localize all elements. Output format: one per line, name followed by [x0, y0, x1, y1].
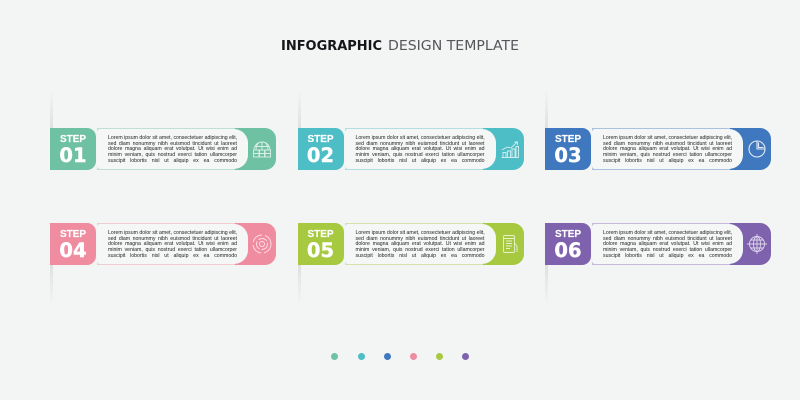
badge: step 02 [298, 128, 344, 170]
text: step 01 description: dolore magna aliquam erat volutpat. Ut wisi enim ad [108, 146, 237, 152]
badge: step 04 [50, 223, 96, 265]
badge: step 03: 03 [554, 144, 582, 166]
badge: step 04: 04 [59, 238, 87, 262]
panel: step 01 [50, 106, 276, 170]
badge: step 02: 02 [307, 144, 334, 166]
badge: step 05: STEP [307, 229, 334, 240]
badge: step 03: STEP [555, 134, 581, 145]
panel: step 03 [545, 106, 771, 170]
text: step 04 description: minim veniam, quis nostrud exerci tation ullamcorper [108, 247, 237, 253]
badge: step 05 [298, 223, 344, 265]
text: step 03 description: Lorem ipsum dolor sit amet, consectetuer adipiscing elit, [603, 135, 732, 141]
text: step 06 description: dolore magna aliquam erat volutpat. Ut wisi enim ad [603, 241, 732, 247]
text: step 05 description: suscipit lobortis nisl ut aliquip ex ea commodo [356, 253, 484, 259]
text: step 01 description: sed diam nonummy nibh euismod tincidunt ut laoreet [108, 141, 237, 147]
badge: step 06: STEP [555, 229, 581, 240]
panel: step 02 [298, 106, 524, 170]
text: step 03 description: sed diam nonummy nibh euismod tincidunt ut laoreet [603, 141, 732, 147]
text: step 06 description: Lorem ipsum dolor sit amet, consectetuer adipiscing elit, [603, 230, 732, 236]
title [281, 39, 519, 54]
badge: step 01: STEP [60, 134, 86, 145]
text: step 03 description: dolore magna aliquam erat volutpat. Ut wisi enim ad [603, 146, 732, 152]
text: step 01 description: Lorem ipsum dolor sit amet, consectetuer adipiscing elit, [108, 135, 237, 141]
text: step 03 description [603, 135, 732, 164]
icon: concentric target [252, 234, 272, 254]
icon: hand holding phone [503, 235, 518, 253]
text: step 04 description: Lorem ipsum dolor sit amet, consectetuer adipiscing elit, [108, 230, 237, 236]
icon: pie chart [748, 140, 766, 158]
text: step 06 description: sed diam nonummy nibh euismod tincidunt ut laoreet [603, 236, 732, 242]
text: step 05 description: dolore magna aliquam erat volutpat. Ut wisi enim ad [356, 241, 484, 247]
text: step 02 description: dolore magna aliquam erat volutpat. Ut wisi enim ad [356, 146, 484, 152]
text: step 05 description: Lorem ipsum dolor sit amet, consectetuer adipiscing elit, [356, 230, 485, 236]
text: step 06 description [603, 230, 732, 259]
text: step 05 description: sed diam nonummy nibh euismod tincidunt ut laoreet [356, 236, 484, 242]
text: step 02 description: suscipit lobortis nisl ut aliquip ex ea commodo [356, 158, 484, 164]
title: DESIGN TEMPLATE [388, 39, 519, 54]
text: step 02 description: minim veniam, quis nostrud exerci tation ullamcorper [356, 152, 484, 158]
text: step 01 description: suscipit lobortis nisl ut aliquip ex ea commodo [108, 158, 237, 164]
text: step 01 description: minim veniam, quis nostrud exerci tation ullamcorper [108, 152, 237, 158]
text: step 02 description: sed diam nonummy nibh euismod tincidunt ut laoreet [356, 141, 484, 147]
text: step 04 description: dolore magna aliquam erat volutpat. Ut wisi enim ad [108, 241, 237, 247]
badge: step 06 [545, 223, 591, 265]
text: step 03 description: suscipit lobortis nisl ut aliquip ex ea commodo [603, 158, 732, 164]
pagination dots [331, 353, 469, 360]
badge: step 06: 06 [554, 238, 582, 262]
text: step 03 description: minim veniam, quis nostrud exerci tation ullamcorper [603, 152, 732, 158]
panel: step 06 [545, 223, 771, 288]
icon: network globe [747, 234, 767, 254]
badge: step 04: STEP [60, 229, 86, 240]
badge: step 03 [545, 128, 591, 170]
text: step 04 description: sed diam nonummy nibh euismod tincidunt ut laoreet [108, 236, 237, 242]
text: step 05 description: minim veniam, quis nostrud exerci tation ullamcorper [356, 247, 484, 253]
text: step 06 description: minim veniam, quis nostrud exerci tation ullamcorper [603, 247, 732, 253]
text: step 06 description: suscipit lobortis nisl ut aliquip ex ea commodo [603, 253, 732, 259]
icon: growth chart [502, 142, 519, 158]
text: step 02 description [356, 135, 485, 164]
text: step 04 description: suscipit lobortis nisl ut aliquip ex ea commodo [108, 253, 237, 259]
text: step 01 description [108, 135, 237, 164]
title: INFOGRAPHIC [281, 39, 382, 54]
badge: step 02: STEP [307, 134, 334, 145]
text: step 02 description: Lorem ipsum dolor sit amet, consectetuer adipiscing elit, [356, 135, 485, 141]
panel: step 05 [298, 223, 524, 288]
text: step 05 description [356, 230, 485, 259]
badge: step 01 [50, 128, 96, 170]
badge: step 05: 05 [307, 238, 334, 262]
text: step 04 description [108, 230, 237, 259]
badge: step 01: 01 [59, 144, 87, 166]
panel: step 04 [50, 223, 276, 288]
icon: globe with buildings [253, 142, 271, 158]
